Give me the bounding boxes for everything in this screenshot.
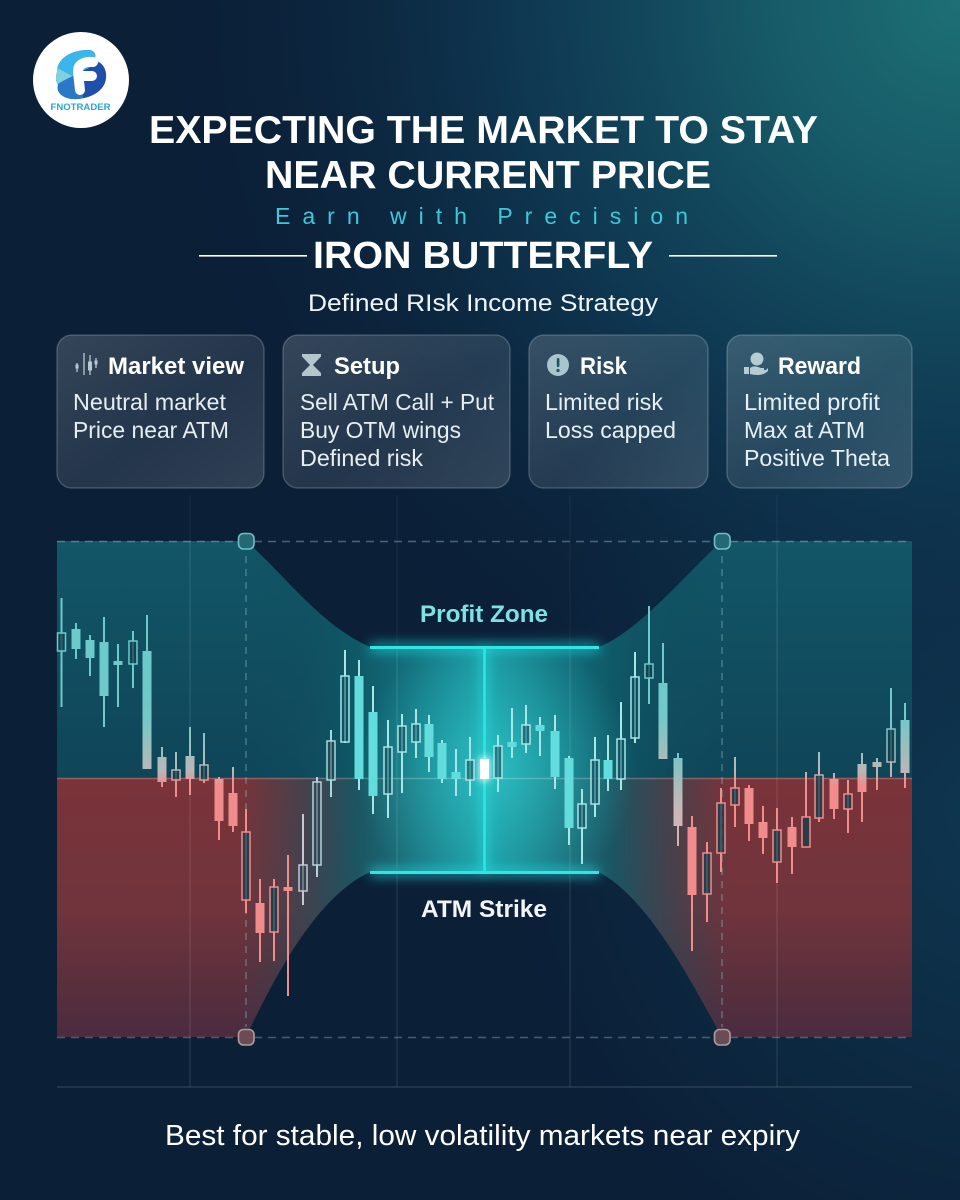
icon: candlesticks bbox=[76, 353, 97, 375]
icon: warning circle bbox=[547, 354, 569, 376]
icon: hourglass bbox=[302, 354, 321, 376]
panel: setup: Setup bbox=[334, 353, 400, 380]
current price candle bbox=[479, 757, 490, 781]
panel: setup: Defined risk bbox=[300, 445, 424, 471]
strategy name: IRON BUTTERFLY bbox=[313, 235, 653, 277]
title: NEAR CURRENT PRICE bbox=[265, 154, 711, 197]
candlesticks: transition bbox=[299, 730, 335, 905]
panel: market view bbox=[57, 335, 264, 488]
panel: risk: Loss capped bbox=[545, 417, 676, 443]
subtitle: Defined RIsk Income Strategy bbox=[308, 290, 658, 317]
loss region bbox=[57, 778, 912, 1037]
footer note: Best for stable, low volatility markets near expiry bbox=[165, 1120, 801, 1152]
logo: FNOTRADER bbox=[33, 32, 129, 128]
panel: setup: Sell ATM Call + Put bbox=[300, 389, 495, 415]
profit region bbox=[57, 541, 912, 778]
icon: hand with coin bbox=[744, 352, 768, 375]
candlesticks: left and right bbox=[58, 598, 910, 996]
panel: risk bbox=[529, 335, 708, 488]
handles bbox=[238, 534, 730, 1045]
panel: reward: Positive Theta bbox=[744, 445, 890, 471]
panel: risk: Risk bbox=[580, 353, 628, 380]
candlesticks: center bbox=[341, 650, 639, 864]
title bbox=[149, 109, 818, 197]
chart: iron butterfly payoff bbox=[57, 495, 912, 1087]
panel: market view: Neutral market bbox=[73, 389, 227, 415]
panel: reward: Max at ATM bbox=[744, 417, 865, 443]
panel: market view: Price near ATM bbox=[73, 417, 229, 443]
panel: setup bbox=[283, 335, 510, 488]
logo: FNOTRADER: FNOTRADER bbox=[50, 102, 111, 112]
panel: risk: Limited risk bbox=[545, 389, 663, 415]
panel: reward: Limited profit bbox=[744, 389, 881, 415]
tagline: Earn with Precision bbox=[275, 203, 688, 229]
central glow zone bbox=[250, 614, 720, 1020]
panel: reward bbox=[727, 335, 912, 488]
panel: reward: Reward bbox=[778, 353, 861, 380]
title: EXPECTING THE MARKET TO STAY bbox=[149, 109, 818, 152]
panel: setup: Buy OTM wings bbox=[300, 417, 461, 443]
label: ATM strike: ATM Strike bbox=[421, 896, 547, 923]
label: profit zone: Profit Zone bbox=[420, 601, 548, 628]
panel: market view: Market view bbox=[108, 353, 244, 380]
profit zone beams bbox=[370, 647, 599, 872]
